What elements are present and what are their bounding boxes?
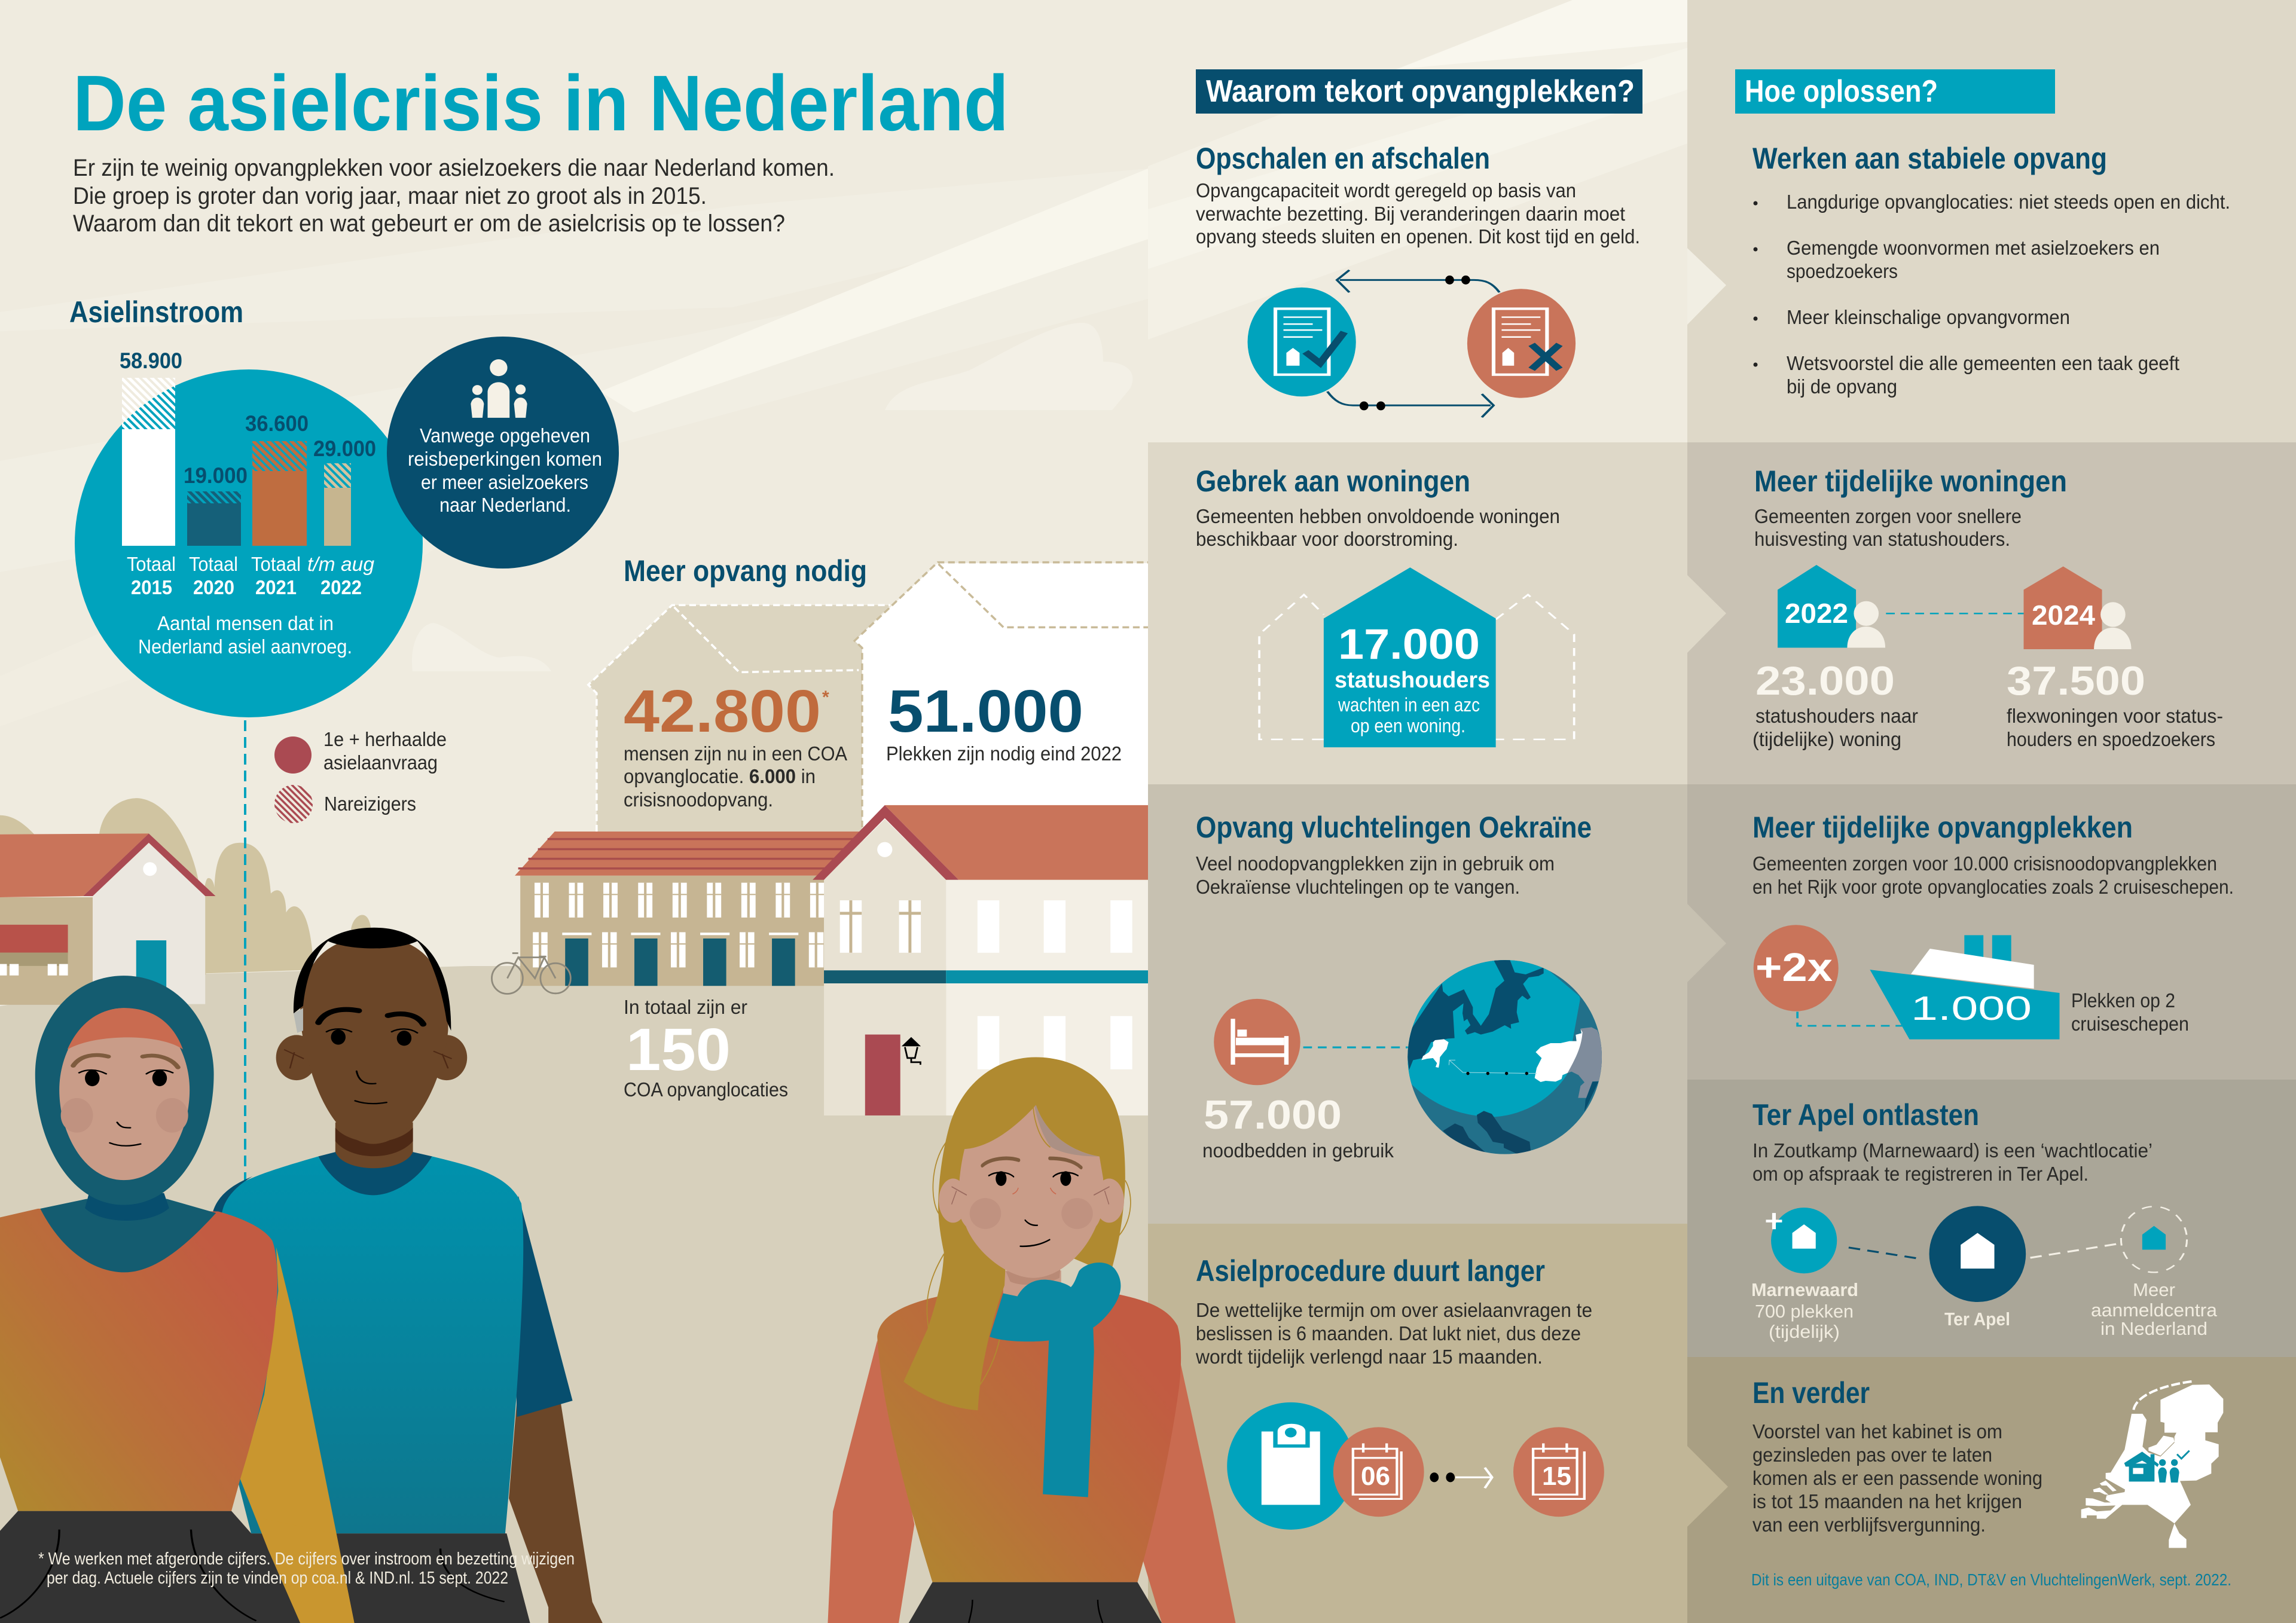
panel: Werken aan stabiele opvang: Gemengde woonvormen met asielzoekers en xyxy=(1787,237,2160,259)
stat: 42.800: mensen zijn nu in een COA xyxy=(624,742,847,765)
bar labels: Totaal xyxy=(127,553,176,575)
panel: Werken aan stabiele opvang xyxy=(1752,142,2230,398)
panel: Gebrek aan woningen: Gebrek aan woningen xyxy=(1196,464,1470,498)
dashed house: needed capacity xyxy=(854,563,1156,840)
panel: Werken aan stabiele opvang: Langdurige opvanglocaties: niet steeds open en dicht. xyxy=(1787,191,2230,213)
bar values: 36.600 xyxy=(245,411,309,436)
panel: Meer tijdelijke opvangplekken: +2x xyxy=(1755,945,1833,990)
panel: Asielprocedure duurt langer: wordt tijdelijk verlengd naar 15 maanden. xyxy=(1195,1346,1543,1368)
stat: 17.000: op een woning. xyxy=(1351,715,1465,736)
panel: Asielprocedure duurt langer: Asielprocedure duurt langer xyxy=(1196,1254,1545,1288)
panel: Meer tijdelijke opvangplekken xyxy=(1752,811,2234,1040)
callout text: Vanwege opgeheven xyxy=(420,424,590,447)
stat: 57.000 xyxy=(1202,1092,1394,1162)
stat: 17.000: 17.000 xyxy=(1338,621,1480,668)
person: man xyxy=(212,928,603,1623)
panel: Ter Apel ontlasten: aanmeldcentra xyxy=(2091,1300,2218,1321)
legend: 1e + herhaalde xyxy=(323,728,447,750)
legend: Nareizigers xyxy=(324,793,416,815)
legend xyxy=(274,728,447,823)
bar labels: t/m aug xyxy=(307,553,375,575)
stat: 17.000: wachten in een azc xyxy=(1338,694,1480,716)
bar values: 58.900 xyxy=(120,349,182,373)
ground xyxy=(0,966,1148,1623)
panel: Gebrek aan woningen: Gemeenten hebben onvoldoende woningen xyxy=(1196,505,1560,527)
bar values xyxy=(120,349,376,488)
header: Hoe oplossen: Hoe oplossen? xyxy=(1745,74,1938,109)
stat: 57.000: noodbedden in gebruik xyxy=(1202,1139,1394,1162)
icon: timeline houses xyxy=(1778,565,2132,649)
panel: Gebrek aan woningen background xyxy=(1148,442,1687,784)
panel: Hoe oplossen background column xyxy=(1687,0,2296,442)
background light rays xyxy=(0,0,1687,726)
panel: Ter Apel ontlasten: Ter Apel ontlasten xyxy=(1752,1098,1979,1132)
bar labels: Totaal xyxy=(251,553,301,575)
title: De asielcrisis in Nederland xyxy=(73,59,1009,147)
bar 2015 xyxy=(122,378,175,546)
stat: 37.500 xyxy=(2007,658,2223,750)
stat: 51.000: Plekken zijn nodig eind 2022 xyxy=(886,742,1122,765)
callout text: er meer asielzoekers xyxy=(421,471,588,493)
colophon: Dit is een uitgave van COA, IND, DT&V en VluchtelingenWerk, sept. 2022. xyxy=(1751,1570,2231,1589)
panel: Meer tijdelijke opvangplekken background xyxy=(1687,784,2296,1080)
panel: Meer tijdelijke opvangplekken: Meer tijdelijke opvangplekken xyxy=(1752,811,2133,844)
panel: Ter Apel ontlasten: Meer xyxy=(2133,1279,2175,1300)
callout text xyxy=(408,424,602,516)
bar labels: Nederland asiel aanvroeg. xyxy=(138,635,352,658)
intro text xyxy=(73,155,835,237)
panel: Werken aan stabiele opvang: Werken aan stabiele opvang xyxy=(1752,142,2107,175)
icon: location network xyxy=(1766,1206,2187,1302)
panel: Opvang vluchtelingen background xyxy=(1148,784,1687,1224)
stat: 150 locations: 150 xyxy=(626,1016,731,1083)
intro text: Er zijn te weinig opvangplekken voor asielzoekers die naar Nederland komen. xyxy=(73,155,835,181)
bar 2020 xyxy=(187,491,241,546)
panel: En verder: En verder xyxy=(1752,1376,1870,1410)
stat: 17.000: statushouders xyxy=(1335,668,1490,693)
panel: Opvang vluchtelingen Oekraine: Opvang vluchtelingen Oekraïne xyxy=(1196,811,1592,844)
stat: 42.800: crisisnoodopvang. xyxy=(624,788,773,811)
panel: Meer tijdelijke opvangplekken: 1.000 xyxy=(1911,989,2032,1028)
stat: 51.000: 51.000 xyxy=(888,678,1083,745)
panel: Meer tijdelijke woningen: huisvesting van statushouders. xyxy=(1754,528,2010,550)
stat: 42.800: * xyxy=(822,687,829,707)
bar labels: 2021 xyxy=(255,576,297,598)
panel: Asielprocedure duurt langer xyxy=(1195,1254,1604,1530)
footnote: * We werken met afgeronde cijfers. De cijfers over instroom en bezetting wijzigen xyxy=(38,1549,575,1569)
panel: Ter Apel ontlasten: Marnewaard xyxy=(1751,1279,1858,1300)
panel: Asielprocedure duurt langer: beslissen is 6 maanden. Dat lukt niet, dus deze xyxy=(1196,1322,1581,1344)
stat: 17.000 xyxy=(1335,621,1490,736)
legend: asielaanvraag xyxy=(323,751,438,774)
row house xyxy=(515,832,863,986)
bar labels: Aantal mensen dat in xyxy=(157,612,334,634)
bar 2021 xyxy=(252,441,307,546)
stat: 23.000: (tijdelijke) woning xyxy=(1752,728,1901,750)
icon: bed xyxy=(1214,999,1408,1085)
panel: Asielprocedure duurt langer: De wettelijke termijn om over asielaanvragen te xyxy=(1196,1299,1592,1321)
panel: Opvang vluchtelingen Oekraine: Oekraïense vluchtelingen op te vangen. xyxy=(1196,876,1520,898)
panel: Meer tijdelijke woningen background xyxy=(1687,442,2296,784)
panel: Werken aan stabiele opvang: spoedzoekers xyxy=(1787,260,1898,282)
panel: Opschalen en afschalen xyxy=(1196,142,1640,417)
panel: En verder: komen als er een passende woning xyxy=(1752,1467,2042,1489)
panel: Werken aan stabiele opvang: bij de opvang xyxy=(1787,375,1897,398)
panel: En verder xyxy=(1752,1376,2223,1548)
panel: Ter Apel ontlasten: In Zoutkamp (Marnewaard) is een ‘wachtlocatie’ xyxy=(1752,1139,2152,1162)
panel: Meer tijdelijke woningen: Meer tijdelijke woningen xyxy=(1754,464,2067,498)
stat: 42.800 xyxy=(624,678,847,811)
bar 2022 xyxy=(324,463,351,546)
stat: 42.800: opvanglocatie. 6.000 in xyxy=(624,765,816,787)
panel: Meer tijdelijke opvangplekken: Gemeenten zorgen voor 10.000 crisisnoodopvangplekken xyxy=(1752,852,2217,875)
header: Hoe oplossen xyxy=(1735,69,2055,114)
stat: 37.500: houders en spoedzoekers xyxy=(2007,728,2215,750)
stat: 23.000: 23.000 xyxy=(1755,658,1895,704)
bar labels: 2015 xyxy=(131,576,172,598)
header: Waarom tekort opvangplekken: Waarom tekort opvangplekken? xyxy=(1206,74,1635,109)
bicycle xyxy=(491,953,570,994)
icon: clipboard and calendars xyxy=(1227,1402,1604,1530)
arrow: row 5 connector xyxy=(1687,1446,1728,1527)
stat: 37.500: flexwoningen voor status- xyxy=(2007,705,2223,727)
panel: Ter Apel ontlasten: 700 plekken xyxy=(1755,1301,1854,1322)
footnote: per dag. Actuele cijfers zijn te vinden op coa.nl & IND.nl. 15 sept. 2022 xyxy=(47,1569,508,1588)
panel: Ter Apel ontlasten: om op afspraak te registreren in Ter Apel. xyxy=(1752,1163,2089,1185)
dashed house: current capacity xyxy=(588,605,890,840)
bar values: 19.000 xyxy=(184,463,248,488)
icon: open and close cycle xyxy=(1248,270,1576,417)
panel: Opvang vluchtelingen Oekraine xyxy=(1196,811,1602,1162)
bar labels: 2022 xyxy=(320,576,362,598)
panel: Ter Apel ontlasten: (tijdelijk) xyxy=(1769,1321,1840,1342)
panel: En verder: van een verblijfsvergunning. xyxy=(1752,1514,1986,1536)
panel: Gebrek aan woningen xyxy=(1196,464,1574,747)
background clouds xyxy=(412,323,1132,671)
panel: Opschalen en afschalen: Opvangcapaciteit wordt geregeld op basis van xyxy=(1196,179,1576,201)
bar labels xyxy=(127,553,375,658)
panel: travel restrictions callout xyxy=(387,337,619,568)
footnote xyxy=(38,1549,575,1588)
stat: 150 locations xyxy=(624,996,788,1101)
stat: 42.800: 42.800 xyxy=(624,678,821,745)
stat: 23.000 xyxy=(1752,658,1918,750)
arrow: row 1 connector xyxy=(1687,248,1726,325)
buildings xyxy=(491,805,1148,1115)
intro text: Die groep is groter dan vorig jaar, maar niet zo groot als in 2015. xyxy=(73,183,707,209)
panel: Meer tijdelijke opvangplekken: Plekken op 2 xyxy=(2071,989,2175,1011)
arrow: row 2 connector xyxy=(1687,575,1726,653)
head and hijab xyxy=(35,976,216,1272)
icon: family xyxy=(471,359,527,418)
panel: Opschalen en afschalen: Opschalen en afschalen xyxy=(1196,142,1490,175)
arm, skirt and torso xyxy=(0,1209,505,1623)
panel: Gebrek aan woningen: beschikbaar voor doorstroming. xyxy=(1196,528,1458,550)
panel: Meer tijdelijke woningen: 2022 xyxy=(1785,598,1848,629)
panel: En verder background xyxy=(1687,1357,2296,1623)
icon: houses xyxy=(1259,567,1574,747)
panel: Ter Apel background xyxy=(1687,1080,2296,1357)
panel: asylum inflow chart xyxy=(75,349,423,717)
bar labels: 2020 xyxy=(193,576,234,598)
panel: Werken aan stabiele opvang: Meer kleinschalige opvangvormen xyxy=(1787,306,2070,328)
panel: Meer tijdelijke woningen: 2024 xyxy=(2032,600,2095,631)
panel: Asielprocedure background xyxy=(1148,1224,1687,1623)
stat: 57.000: 57.000 xyxy=(1204,1092,1342,1138)
panel: En verder: is tot 15 maanden na het krijgen xyxy=(1752,1490,2022,1512)
intro text: Waarom dan dit tekort en wat gebeurt er om de asielcrisis op te lossen? xyxy=(73,210,785,237)
panel: Meer tijdelijke opvangplekken: en het Rijk voor grote opvanglocaties zoals 2 cruiseschepen. xyxy=(1752,876,2234,898)
panel: Asielprocedure duurt langer: 06 xyxy=(1361,1462,1390,1491)
icon: globe xyxy=(1405,958,1602,1156)
panel: En verder: Voorstel van het kabinet is om xyxy=(1752,1420,2002,1442)
background village: trees and house xyxy=(0,798,371,1005)
callout text: reisbeperkingen komen xyxy=(408,448,602,470)
heading: Asielinstroom: Asielinstroom xyxy=(69,295,243,329)
panel: Opschalen en afschalen: verwachte bezetting. Bij veranderingen daarin moet xyxy=(1196,203,1625,225)
stat: 51.000 xyxy=(886,678,1122,765)
stat: 150 locations: In totaal zijn er xyxy=(624,996,747,1018)
panel: Asielprocedure duurt langer: 15 xyxy=(1542,1462,1571,1491)
panel: Ter Apel ontlasten: Ter Apel xyxy=(1944,1309,2010,1329)
stat: 37.500: 37.500 xyxy=(2007,658,2145,704)
stat: 23.000: statushouders naar xyxy=(1755,705,1918,727)
panel: Meer tijdelijke woningen: Gemeenten zorgen voor snellere xyxy=(1754,505,2022,527)
panel: Ter Apel ontlasten: in Nederland xyxy=(2100,1318,2208,1339)
panel: Meer tijdelijke woningen xyxy=(1752,464,2223,750)
panel: Werken aan stabiele opvang: Wetsvoorstel die alle gemeenten een taak geeft xyxy=(1787,352,2179,374)
dashed line from chart to people xyxy=(244,720,246,1219)
main building xyxy=(813,805,1148,1115)
panel: Ter Apel ontlasten xyxy=(1751,1098,2218,1342)
person: blonde woman with scarf xyxy=(828,1057,1235,1623)
icon: map of the Netherlands xyxy=(2081,1381,2223,1548)
bar labels: Totaal xyxy=(189,553,238,575)
arrow: row 3 connector xyxy=(1687,904,1726,982)
heading: Meer opvang nodig: Meer opvang nodig xyxy=(624,554,867,588)
stat: 150 locations: COA opvanglocaties xyxy=(624,1078,788,1101)
panel: Opvang vluchtelingen Oekraine: Veel noodopvangplekken zijn in gebruik om xyxy=(1196,852,1555,875)
panel: Meer tijdelijke opvangplekken: cruiseschepen xyxy=(2071,1013,2189,1035)
icon: cruise ship xyxy=(1754,925,2060,1040)
person: woman with hijab xyxy=(0,976,505,1623)
bar values: 29.000 xyxy=(313,436,376,461)
panel: Opschalen en afschalen: opvang steeds sluiten en openen. Dit kost tijd en geld. xyxy=(1196,225,1640,247)
callout text: naar Nederland. xyxy=(439,494,571,516)
panel: En verder: gezinsleden pas over te laten xyxy=(1752,1444,1992,1466)
